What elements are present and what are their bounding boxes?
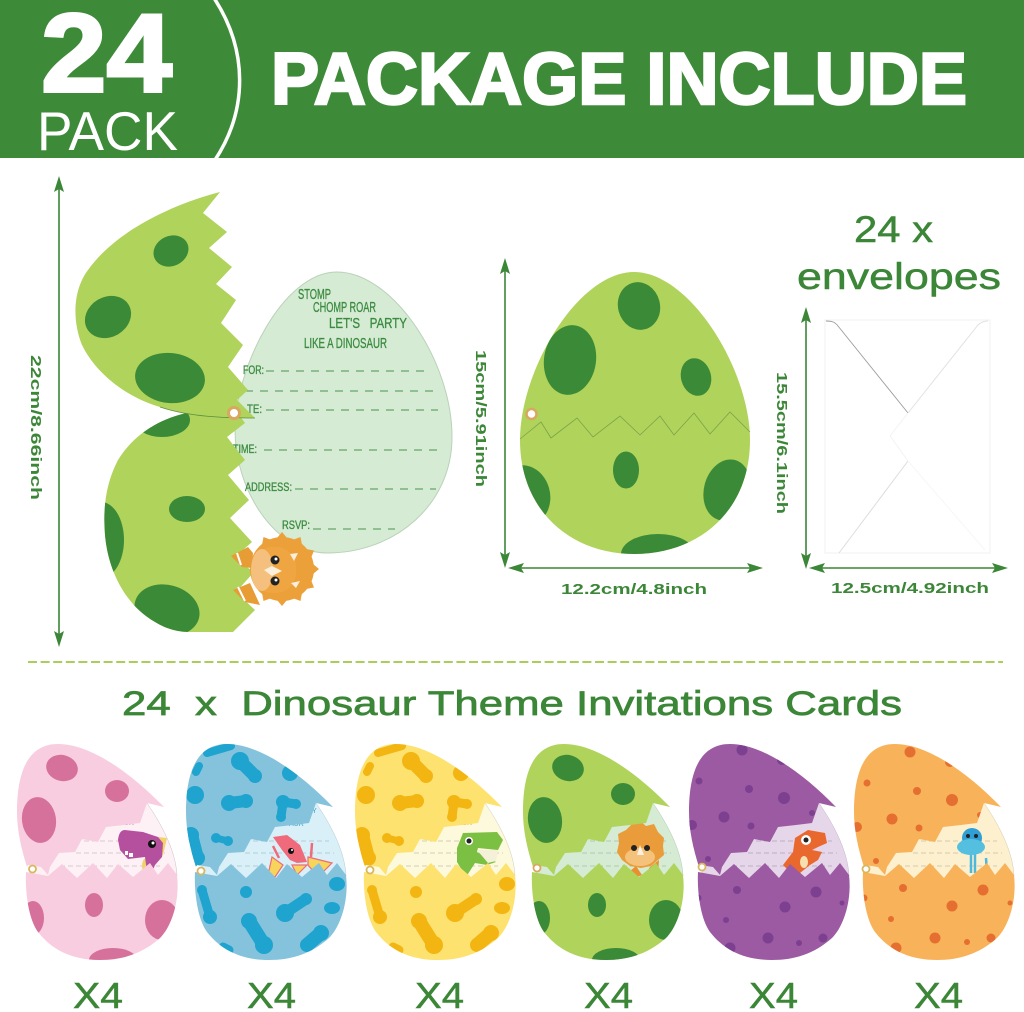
card: blue egg: Y: [312, 808, 317, 815]
invitation text: ADDRESS:: [245, 482, 292, 494]
icon: orange dinosaur: [783, 830, 827, 877]
invitation text: LET'S PARTY: [329, 316, 407, 332]
eyelet: [228, 408, 240, 418]
invitation text: FOR:: [243, 365, 264, 377]
invitation text: [233, 287, 407, 532]
dimension: egg width: [508, 563, 763, 598]
invitation text: TE:: [247, 404, 262, 416]
card: yellow egg: UR: [462, 820, 472, 827]
dimension: envelope height: [773, 307, 811, 569]
pack label: PACK: [37, 100, 178, 162]
envelopes heading: [797, 209, 1001, 297]
dimension: open card height: 22cm/8.66inch: [27, 355, 43, 500]
envelopes heading: envelopes: [797, 256, 1001, 297]
card inner page: [235, 272, 452, 553]
invitation text: RSVP:: [282, 520, 310, 532]
icon: pterodactyl: [268, 835, 332, 877]
section heading: 24 x Dinosaur Theme Invitations Cards: [122, 685, 902, 723]
envelope: [825, 320, 990, 553]
card: blue egg: AUR: [289, 821, 304, 828]
dimension: envelope width: [809, 563, 1008, 597]
eyelet: [526, 409, 536, 419]
upper shell: [75, 192, 255, 418]
card: green egg: [523, 744, 684, 972]
icon: green t-rex: [457, 832, 503, 877]
lower shell: [104, 413, 255, 632]
card: orange egg: [852, 744, 1015, 960]
quantity labels: [73, 975, 963, 1012]
envelopes heading: 24 x: [854, 209, 934, 250]
icon: purple dinosaur: [118, 830, 167, 877]
closed green egg card: [520, 272, 750, 554]
dimension: open card height: [27, 176, 64, 647]
icon: triceratops: [231, 532, 319, 606]
icon: orange triceratops: [617, 821, 664, 878]
invitation text: CHOMP ROAR: [313, 300, 376, 316]
dimension: egg height: [472, 258, 510, 568]
invitation text: LIKE A DINOSAUR: [304, 336, 387, 352]
card: purple egg: [687, 744, 850, 960]
card: blue egg: [183, 744, 347, 960]
invitation text: TIME:: [233, 444, 257, 456]
icon: blue dinosaur: [957, 828, 987, 874]
header banner: [0, 0, 1024, 162]
dimension: envelope width: 12.5cm/4.92inch: [831, 580, 989, 597]
dimension: egg width: 12.2cm/4.8inch: [561, 581, 707, 598]
dimension: egg height: 15cm/5.91inch: [472, 350, 489, 487]
dimension: envelope height: 15.5cm/6.1inch: [773, 372, 790, 514]
invitation text: STOMP: [298, 287, 331, 303]
card: pink egg: UR: [124, 820, 134, 827]
open invitation card: [65, 185, 452, 643]
card: yellow egg: [354, 744, 516, 960]
title: PACKAGE INCLUDE: [271, 39, 967, 120]
card: pink egg: [17, 744, 179, 972]
